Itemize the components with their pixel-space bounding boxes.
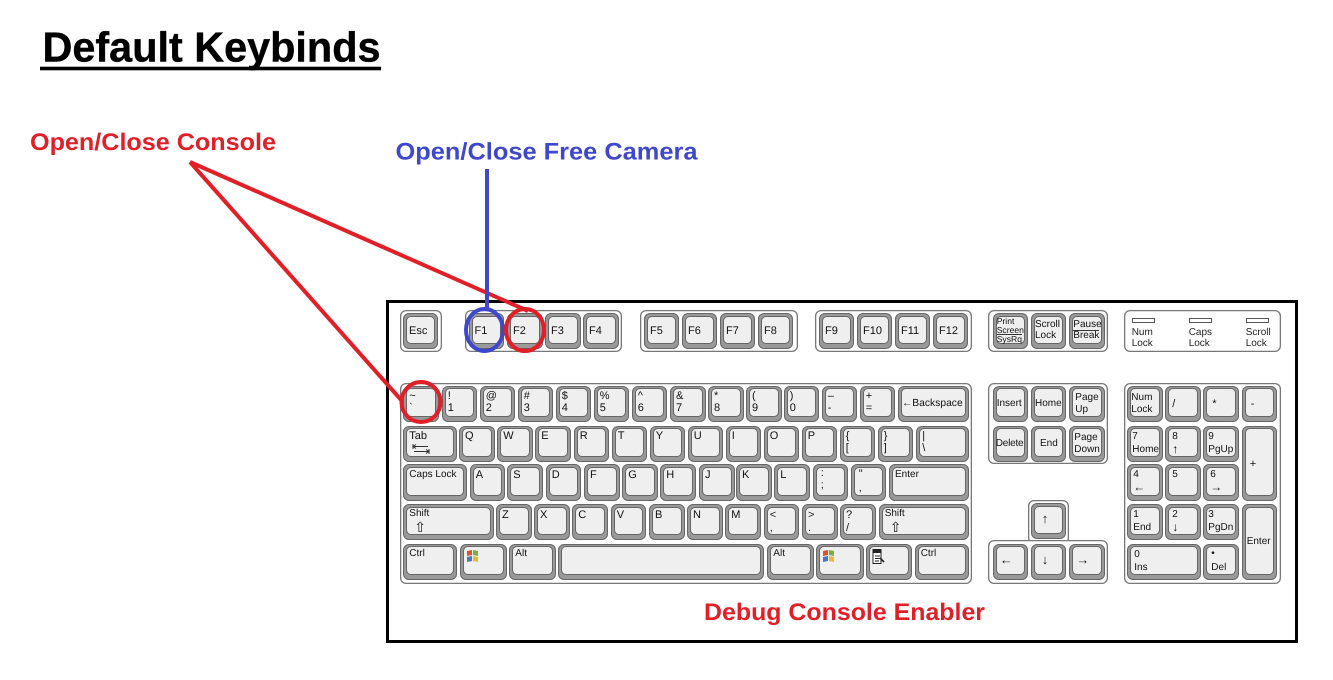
panel: print screen, scroll lock, pause keys: Lock <box>1035 330 1056 341</box>
row: shift keys: ⇧ <box>414 520 426 536</box>
row: QWERTY keys: E <box>541 430 549 442</box>
row: shift keys: M <box>731 509 740 521</box>
panel: F5 to F8 keys: F5 <box>650 325 663 337</box>
row: number keys: $ <box>562 390 568 402</box>
panel: F9 to F12 keys: F11 <box>901 325 919 337</box>
row: number keys: 3 <box>524 402 530 414</box>
row: delete, end, page down: Delete <box>996 438 1023 449</box>
row: number keys: * <box>714 390 718 402</box>
row: home row keys: J <box>705 469 710 481</box>
row: number keys: 7 <box>676 402 682 414</box>
row: home row keys: L <box>780 469 786 481</box>
row: number keys: # <box>524 390 530 402</box>
panel: lock indicators <box>1124 310 1281 352</box>
row: insert, home, page up: Insert <box>997 398 1022 409</box>
panel: numeric keypad: • <box>1211 548 1215 559</box>
panel: F5 to F8 keys <box>640 310 798 352</box>
row: home row keys: G <box>628 469 637 481</box>
row: shift keys: < <box>770 509 776 521</box>
panel: lock indicators: Caps <box>1189 327 1212 338</box>
panel: print screen, scroll lock, pause keys: SysRq <box>997 334 1022 344</box>
panel: print screen, scroll lock, pause keys: Screen <box>997 324 1024 334</box>
row: QWERTY keys: } <box>884 430 887 442</box>
label: debug console enabler: Debug Console Enabler <box>704 599 985 626</box>
row: home row keys: " <box>859 468 863 480</box>
panel: print screen, scroll lock, pause keys <box>988 310 1108 352</box>
row: bottom modifier keys and space bar: Alt <box>773 548 785 559</box>
row: bottom modifier keys and space bar: Ctrl <box>409 548 425 559</box>
highlight: tilde key <box>402 382 440 422</box>
panel: F1 to F4 keys: F1 <box>474 325 487 337</box>
row: shift keys: B <box>655 509 662 521</box>
panel: numeric keypad: 1 <box>1133 509 1139 520</box>
panel: numeric keypad: 6 <box>1210 469 1216 480</box>
row: home row keys: H <box>666 469 674 481</box>
row: home row keys: F <box>590 469 597 481</box>
panel: F5 to F8 keys: F6 <box>688 325 701 337</box>
row: home row keys: , <box>859 482 862 494</box>
row: shift keys: > <box>808 509 814 521</box>
row: QWERTY keys: W <box>503 430 514 442</box>
row: shift keys: N <box>693 509 701 521</box>
row: number keys: ~ <box>409 390 416 402</box>
row: QWERTY keys: ] <box>884 442 887 454</box>
row: delete, end, page down: Page <box>1074 432 1098 443</box>
panel: main key block <box>400 383 972 584</box>
row: delete, end, page down <box>993 426 1105 462</box>
row: shift keys: ⇧ <box>890 520 901 536</box>
panel: arrow keys: → <box>1076 552 1089 567</box>
label: open/close console: Open/Close Console <box>30 129 276 156</box>
panel: F1 to F4 keys: F4 <box>589 325 602 337</box>
panel: escape key: Esc <box>409 325 427 337</box>
panel: F5 to F8 keys: F8 <box>764 325 777 337</box>
panel: numeric keypad: Ins <box>1134 562 1148 573</box>
row: number keys: ^ <box>638 390 643 402</box>
row: delete, end, page down: Down <box>1074 444 1100 455</box>
panel: numeric keypad: * <box>1212 398 1217 410</box>
panel: F1 to F4 keys: F3 <box>551 325 564 337</box>
panel: numeric keypad: Home <box>1132 444 1159 455</box>
row: number keys: % <box>600 390 609 402</box>
row: bottom modifier keys and space bar: Alt <box>515 548 527 559</box>
panel: numeric keypad: 8 <box>1172 431 1178 442</box>
row: QWERTY keys: T <box>618 430 624 442</box>
panel: lock indicators: Num <box>1132 327 1153 338</box>
panel: numeric keypad: 9 <box>1208 431 1214 442</box>
panel: arrow keys <box>988 500 1108 584</box>
panel: numeric keypad: Lock <box>1131 404 1152 415</box>
highlight: F1 key <box>466 309 503 351</box>
row: number keys: & <box>676 390 683 402</box>
row: home row keys: ; <box>821 479 824 491</box>
panel: numeric keypad: ↑ <box>1172 442 1178 456</box>
row: QWERTY keys: Tab <box>409 430 427 442</box>
panel: lock indicators: Lock <box>1246 338 1267 349</box>
row: number keys: 9 <box>752 402 758 414</box>
row: shift keys: Shift <box>885 508 905 519</box>
keyboard frame <box>386 300 1298 643</box>
row: home row keys: Caps Lock <box>409 469 457 480</box>
row: number keys: 6 <box>638 402 644 414</box>
panel: numeric keypad: + <box>1250 458 1256 470</box>
row: QWERTY keys: Y <box>656 430 663 442</box>
panel: numeric keypad: 2 <box>1172 509 1178 520</box>
panel: numeric keypad: PgUp <box>1208 444 1233 455</box>
panel: F1 to F4 keys: F2 <box>513 325 526 337</box>
panel: numeric keypad: ← <box>1133 480 1145 494</box>
row: shift keys: V <box>617 509 624 521</box>
row: insert, home, page up: Home <box>1035 398 1062 409</box>
panel: print screen, scroll lock, pause keys: Print <box>997 316 1014 326</box>
panel: print screen, scroll lock, pause keys: Pause <box>1073 319 1102 330</box>
arrow: console label to F2 key <box>190 162 528 311</box>
panel: F9 to F12 keys: F12 <box>939 325 958 337</box>
row: number keys: ! <box>448 390 451 402</box>
panel: numeric keypad: End <box>1133 522 1151 533</box>
row: home row keys: K <box>742 469 749 481</box>
arrow: console label to tilde key <box>190 162 402 401</box>
row: number keys: 1 <box>448 402 454 414</box>
row: QWERTY keys: { <box>846 430 849 442</box>
panel: print screen, scroll lock, pause keys: Break <box>1073 330 1099 341</box>
row: number keys: 5 <box>600 402 606 414</box>
row: shift keys <box>403 504 969 540</box>
row: number keys: 4 <box>562 402 568 414</box>
row: number keys: 0 <box>790 402 796 414</box>
panel: numeric keypad: ↓ <box>1172 520 1178 534</box>
row: number keys: ` <box>409 402 413 414</box>
row: home row keys: : <box>821 467 824 479</box>
row: home row keys: D <box>552 469 560 481</box>
row: insert, home, page up: Page <box>1075 392 1099 403</box>
panel: numeric keypad <box>1124 383 1281 584</box>
panel: arrow keys: ← <box>1000 552 1013 567</box>
panel: F9 to F12 keys: F10 <box>863 325 882 337</box>
panel: numeric keypad: 4 <box>1133 469 1139 480</box>
panel: lock indicators: Lock <box>1132 338 1153 349</box>
row: home row keys <box>403 464 969 501</box>
row: QWERTY keys: U <box>694 430 702 442</box>
row: number keys: ←Backspace <box>902 398 963 409</box>
row: insert, home, page up <box>993 386 1105 422</box>
panel: numeric keypad: 5 <box>1172 469 1178 480</box>
row: shift keys: ? <box>846 509 852 521</box>
panel: F1 to F4 keys <box>465 310 622 352</box>
row: bottom modifier keys and space bar: Ctrl <box>921 548 936 559</box>
panel: numeric keypad: 0 <box>1134 549 1140 560</box>
panel: F9 to F12 keys <box>815 310 972 352</box>
row: number keys: – <box>828 390 834 402</box>
panel: numeric keypad: PgDn <box>1208 522 1233 533</box>
panel: numeric keypad: 7 <box>1132 431 1138 442</box>
panel: numeric keypad: - <box>1251 398 1254 410</box>
arrow: camera label to F1 key <box>485 169 489 311</box>
row: number keys: = <box>866 402 872 414</box>
row: number keys: 8 <box>714 402 720 414</box>
panel: F5 to F8 keys: F7 <box>726 325 739 337</box>
row: number keys: ( <box>752 390 756 402</box>
panel: navigation keys <box>988 383 1108 464</box>
row: number keys: @ <box>486 390 497 402</box>
row: QWERTY keys: I <box>732 430 735 442</box>
row: QWERTY keys: Q <box>465 430 474 442</box>
panel: arrow keys: ↑ <box>1042 511 1048 526</box>
row: number keys: - <box>828 402 831 414</box>
row: number keys: ) <box>790 390 793 402</box>
row: shift keys: X <box>540 509 547 521</box>
panel: numeric keypad: / <box>1172 398 1175 410</box>
row: bottom modifier keys and space bar <box>403 544 969 580</box>
row: home row keys: S <box>513 469 521 481</box>
row: QWERTY keys: \ <box>922 442 925 454</box>
row: QWERTY keys: | <box>922 430 925 442</box>
panel: arrow keys: ↓ <box>1042 552 1048 567</box>
row: QWERTY keys: O <box>770 430 778 442</box>
row: shift keys: C <box>578 509 586 521</box>
row: shift keys: , <box>770 522 773 534</box>
panel: numeric keypad: 3 <box>1208 509 1214 520</box>
panel: numeric keypad: Enter <box>1247 536 1271 547</box>
row: shift keys: . <box>808 522 811 534</box>
panel: F9 to F12 keys: F9 <box>825 325 838 337</box>
row: number keys: + <box>866 390 872 402</box>
row: QWERTY keys: [ <box>846 442 849 454</box>
panel: numeric keypad: Del <box>1211 562 1226 573</box>
highlight: F2 key <box>506 309 544 351</box>
panel: numeric keypad: → <box>1210 480 1222 494</box>
row: number keys <box>403 386 969 422</box>
panel: escape key <box>400 310 442 352</box>
row: delete, end, page down: End <box>1040 438 1058 449</box>
row: QWERTY keys: P <box>808 430 815 442</box>
row: QWERTY keys <box>403 426 969 462</box>
row: insert, home, page up: Up <box>1075 404 1088 415</box>
row: shift keys: / <box>846 522 849 534</box>
row: shift keys: Z <box>502 509 509 521</box>
panel: print screen, scroll lock, pause keys: Scroll <box>1035 319 1060 330</box>
panel: lock indicators: Scroll <box>1246 327 1271 338</box>
row: number keys: 2 <box>486 402 492 414</box>
label: open/close free camera: Open/Close Free Camera <box>396 138 698 166</box>
row: home row keys: A <box>476 469 483 481</box>
row: QWERTY keys: R <box>580 430 588 442</box>
title: Default Keybinds <box>42 24 380 70</box>
panel: lock indicators: Lock <box>1189 338 1210 349</box>
row: shift keys: Shift <box>409 508 429 519</box>
panel: numeric keypad: Num <box>1131 392 1152 403</box>
row: home row keys: Enter <box>895 469 919 480</box>
